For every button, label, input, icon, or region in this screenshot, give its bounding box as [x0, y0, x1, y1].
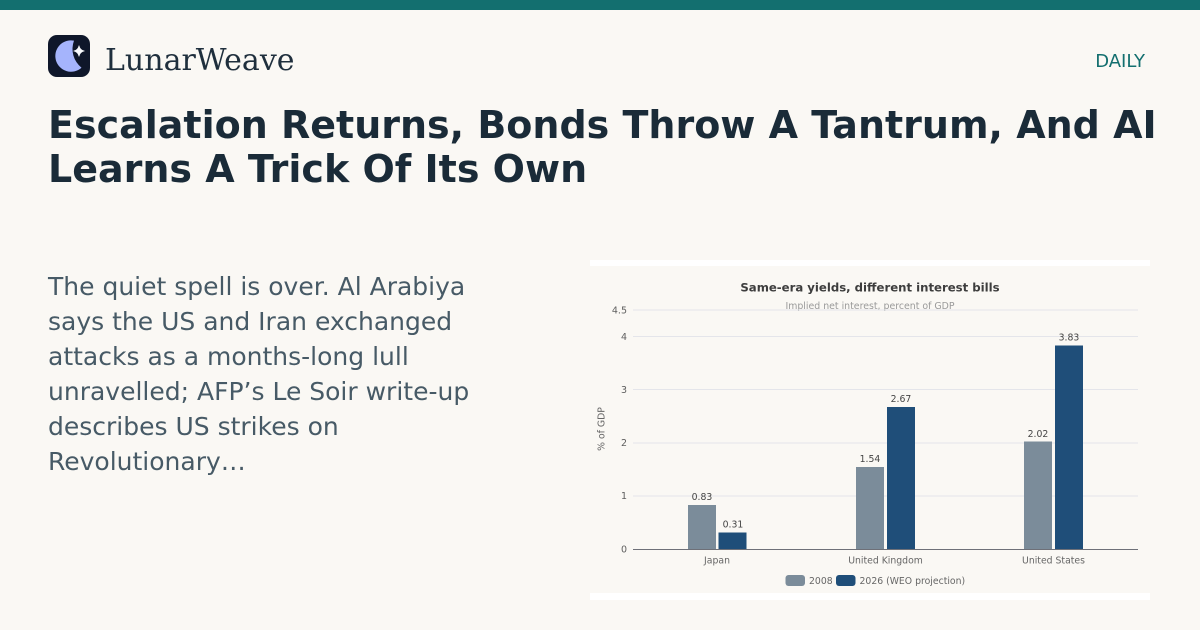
bars: United States: United States	[1022, 556, 1085, 566]
bars: United States: 2.02	[1028, 429, 1048, 440]
y axis with gridlines: % of GDP	[596, 407, 608, 451]
summary text: says the US and Iran exchanged	[48, 307, 452, 336]
y axis with gridlines: 3	[621, 385, 627, 396]
summary text: Revolutionary…	[48, 447, 246, 476]
bars: United Kingdom: United Kingdom	[848, 556, 923, 566]
summary text	[48, 272, 469, 476]
headline: Learns A Trick Of Its Own	[48, 147, 587, 191]
legend	[786, 575, 965, 587]
bars: Japan	[688, 492, 746, 566]
bars: Japan: Japan	[703, 556, 730, 566]
summary text: The quiet spell is over. Al Arabiya	[48, 272, 465, 301]
y axis with gridlines: 1	[621, 491, 627, 502]
panel: bar chart card	[590, 260, 1150, 600]
y axis with gridlines: 0	[621, 544, 627, 556]
logo icon: crescent moon and star	[48, 35, 90, 77]
bars: United Kingdom	[848, 394, 923, 566]
bars: United Kingdom: 2.67	[891, 394, 911, 405]
bars: United States: 3.83	[1059, 332, 1079, 344]
headline: Escalation Returns, Bonds Throw A Tantrum, And AI	[48, 103, 1157, 147]
x axis baseline	[633, 548, 1138, 550]
bars: Japan: 0.31	[723, 520, 743, 530]
bars: United Kingdom: 1.54	[860, 454, 880, 465]
y axis with gridlines: 4.5	[612, 306, 627, 316]
top accent bar	[0, 0, 1200, 10]
summary text: unravelled; AFP’s Le Soir write-up	[48, 377, 469, 406]
y axis with gridlines: 2	[621, 438, 627, 449]
chart title: Same-era yields, different interest bills	[740, 280, 1000, 294]
chart subtitle: Implied net interest, percent of GDP	[785, 301, 955, 312]
summary text: attacks as a months-long lull	[48, 342, 409, 371]
legend: 2008	[809, 576, 833, 587]
bars: United States	[1022, 332, 1085, 566]
brand name: LunarWeave	[105, 43, 295, 78]
bars: Japan: 0.83	[692, 492, 712, 503]
y axis with gridlines	[596, 306, 1138, 556]
summary text: describes US strikes on	[48, 412, 339, 441]
y axis with gridlines: 4	[621, 332, 627, 343]
section tag: DAILY	[1095, 51, 1145, 72]
legend: 2026 (WEO projection)	[860, 576, 965, 587]
headline	[48, 103, 1157, 191]
